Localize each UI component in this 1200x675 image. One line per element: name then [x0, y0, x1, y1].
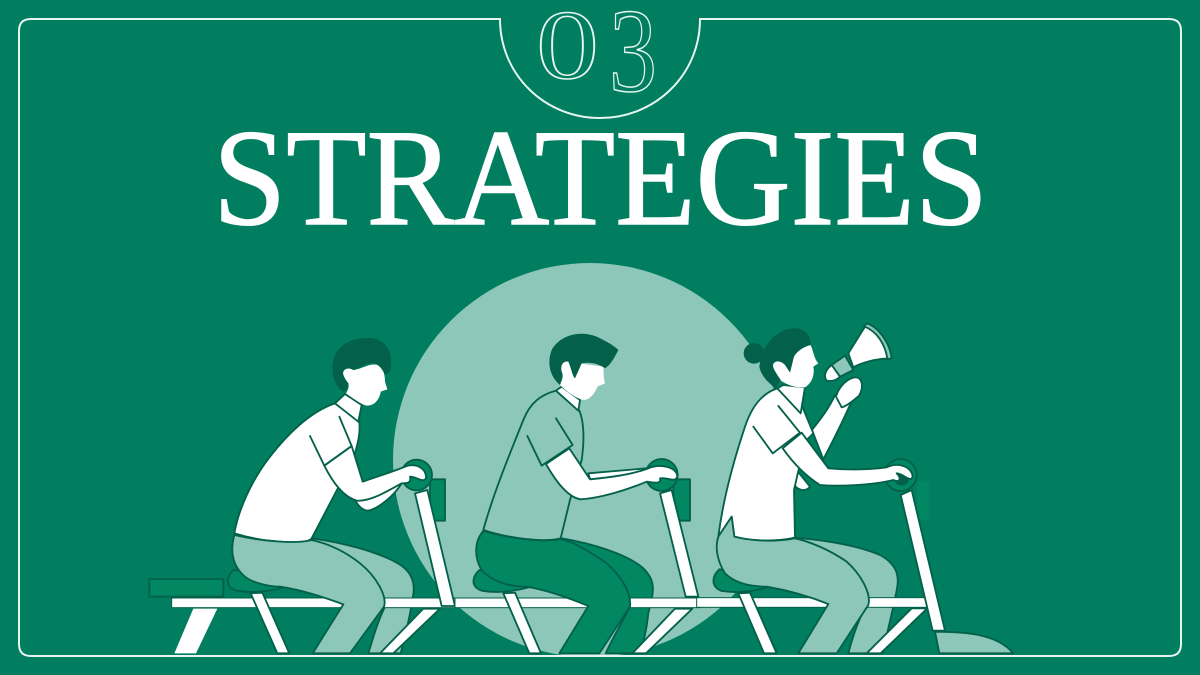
handlebar post: [415, 490, 455, 606]
near leg: [232, 535, 385, 653]
seat post: [251, 593, 289, 653]
bike bar: [455, 598, 700, 608]
front pedal: [935, 632, 1013, 653]
megaphone cone: [848, 327, 887, 367]
neck: [335, 394, 362, 422]
shirt: [483, 391, 583, 540]
person 1 on bike: [149, 338, 455, 653]
near arm: [324, 446, 426, 501]
megaphone band: [832, 356, 853, 377]
title: STRATEGIES: [213, 101, 988, 254]
face: [773, 345, 818, 388]
seat post: [503, 593, 541, 653]
far leg: [562, 538, 653, 653]
rear leg: [174, 609, 217, 653]
hair: [549, 334, 618, 385]
far arm: [588, 468, 653, 480]
far arm: [350, 477, 402, 511]
lower far arm: [793, 470, 810, 490]
raised arm: [812, 395, 851, 459]
handlebar ring: [401, 460, 432, 490]
handlebar post: [901, 490, 945, 631]
sleeve: [527, 418, 573, 466]
front brace: [867, 608, 927, 653]
handlebar box: [430, 479, 445, 521]
far leg: [795, 538, 898, 653]
far leg: [312, 538, 414, 653]
bike bar: [697, 598, 927, 607]
person 2 on bike: [455, 334, 700, 653]
seat post: [738, 593, 777, 653]
bike bar: [172, 598, 455, 608]
near arm: [546, 448, 677, 499]
sleeve: [753, 406, 800, 453]
person 3 on bike with megaphone: [697, 323, 1013, 653]
handlebar box: [673, 479, 690, 521]
face: [343, 364, 387, 406]
rear rack: [149, 579, 223, 597]
section number 03: [536, 0, 657, 117]
hair: [759, 328, 811, 388]
front brace: [632, 609, 692, 653]
megaphone mouthpiece: [825, 365, 840, 381]
saddle: [713, 569, 770, 592]
handlebar box: [917, 481, 929, 520]
shirt: [234, 403, 360, 542]
handlebar ring: [885, 459, 917, 491]
background circle: [393, 263, 787, 657]
megaphone rim: [864, 323, 892, 359]
handlebar post: [660, 490, 698, 597]
megaphone: [825, 323, 892, 381]
hair: [332, 338, 391, 392]
near leg: [476, 531, 630, 653]
neck: [777, 385, 805, 413]
sleeve: [310, 417, 352, 466]
saddle: [473, 570, 532, 592]
raised hand: [836, 377, 862, 407]
shirt: [718, 388, 813, 541]
saddle: [228, 570, 287, 592]
neck: [556, 387, 580, 411]
near leg: [717, 517, 869, 653]
near arm: [783, 433, 913, 486]
grip: [894, 471, 909, 486]
front brace: [380, 609, 440, 653]
handlebar ring: [646, 459, 678, 491]
face: [560, 361, 605, 400]
hair bun: [744, 343, 764, 364]
